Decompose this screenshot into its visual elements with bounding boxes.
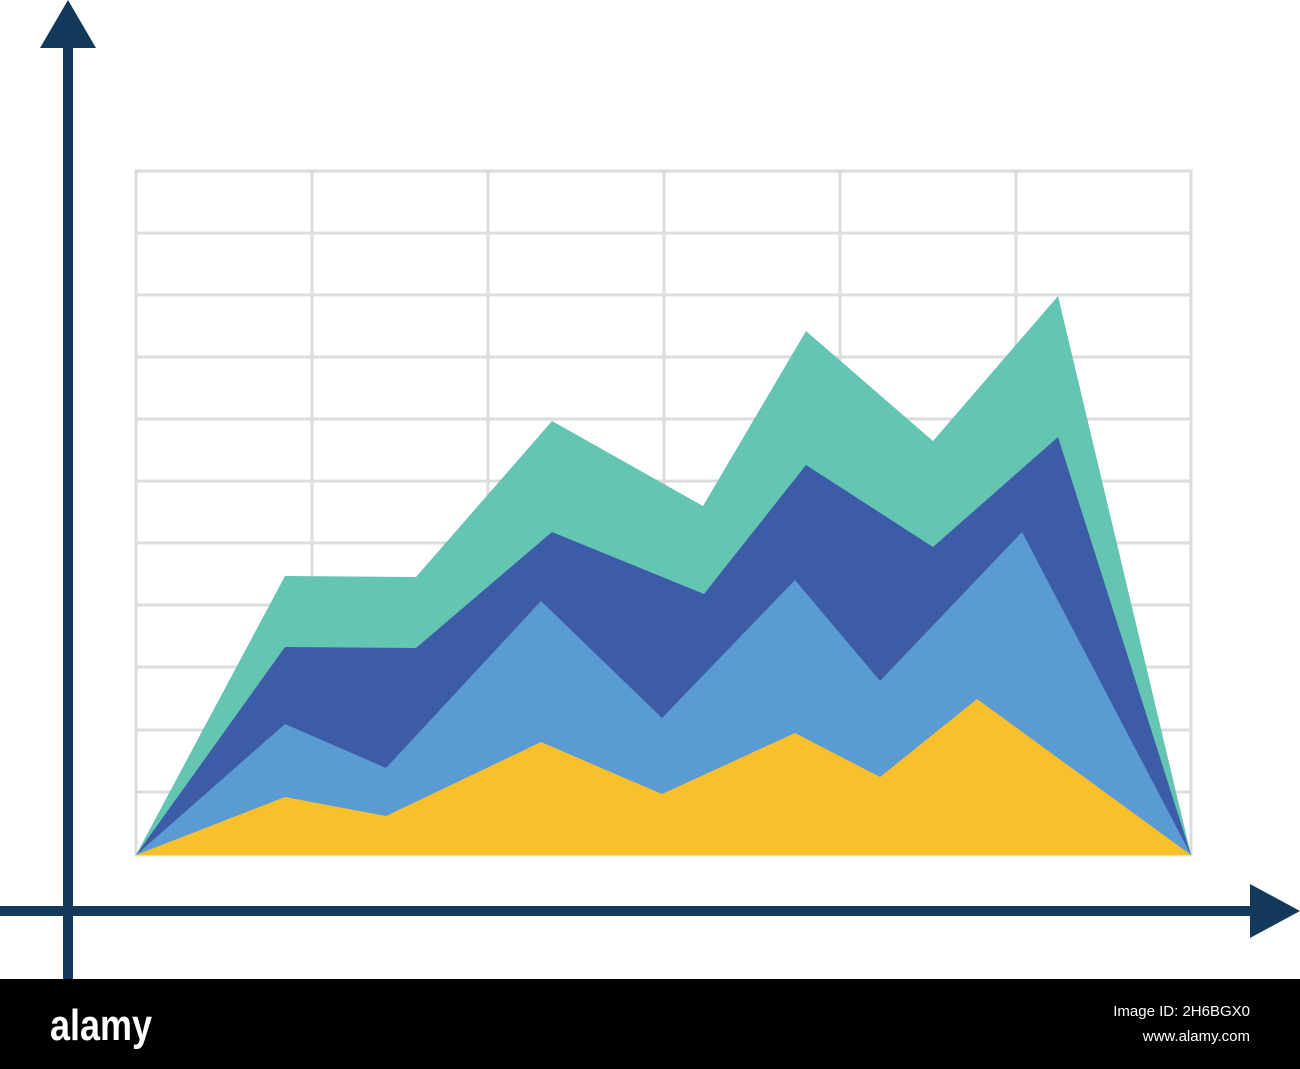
layer: teal xyxy=(136,296,1191,855)
footer bar: alamy xyxy=(50,1001,152,1050)
footer bar: Image ID: 2H6BGX0 xyxy=(1113,1003,1250,1020)
layer: yellow xyxy=(136,699,1191,855)
layer: light blue xyxy=(136,532,1191,855)
footer bar xyxy=(0,979,1300,1069)
layer: dark blue xyxy=(136,437,1191,855)
footer bar: www.alamy.com xyxy=(1142,1028,1250,1045)
area chart layers xyxy=(136,296,1191,855)
y axis arrow xyxy=(40,0,96,979)
x axis arrow xyxy=(0,884,1300,938)
